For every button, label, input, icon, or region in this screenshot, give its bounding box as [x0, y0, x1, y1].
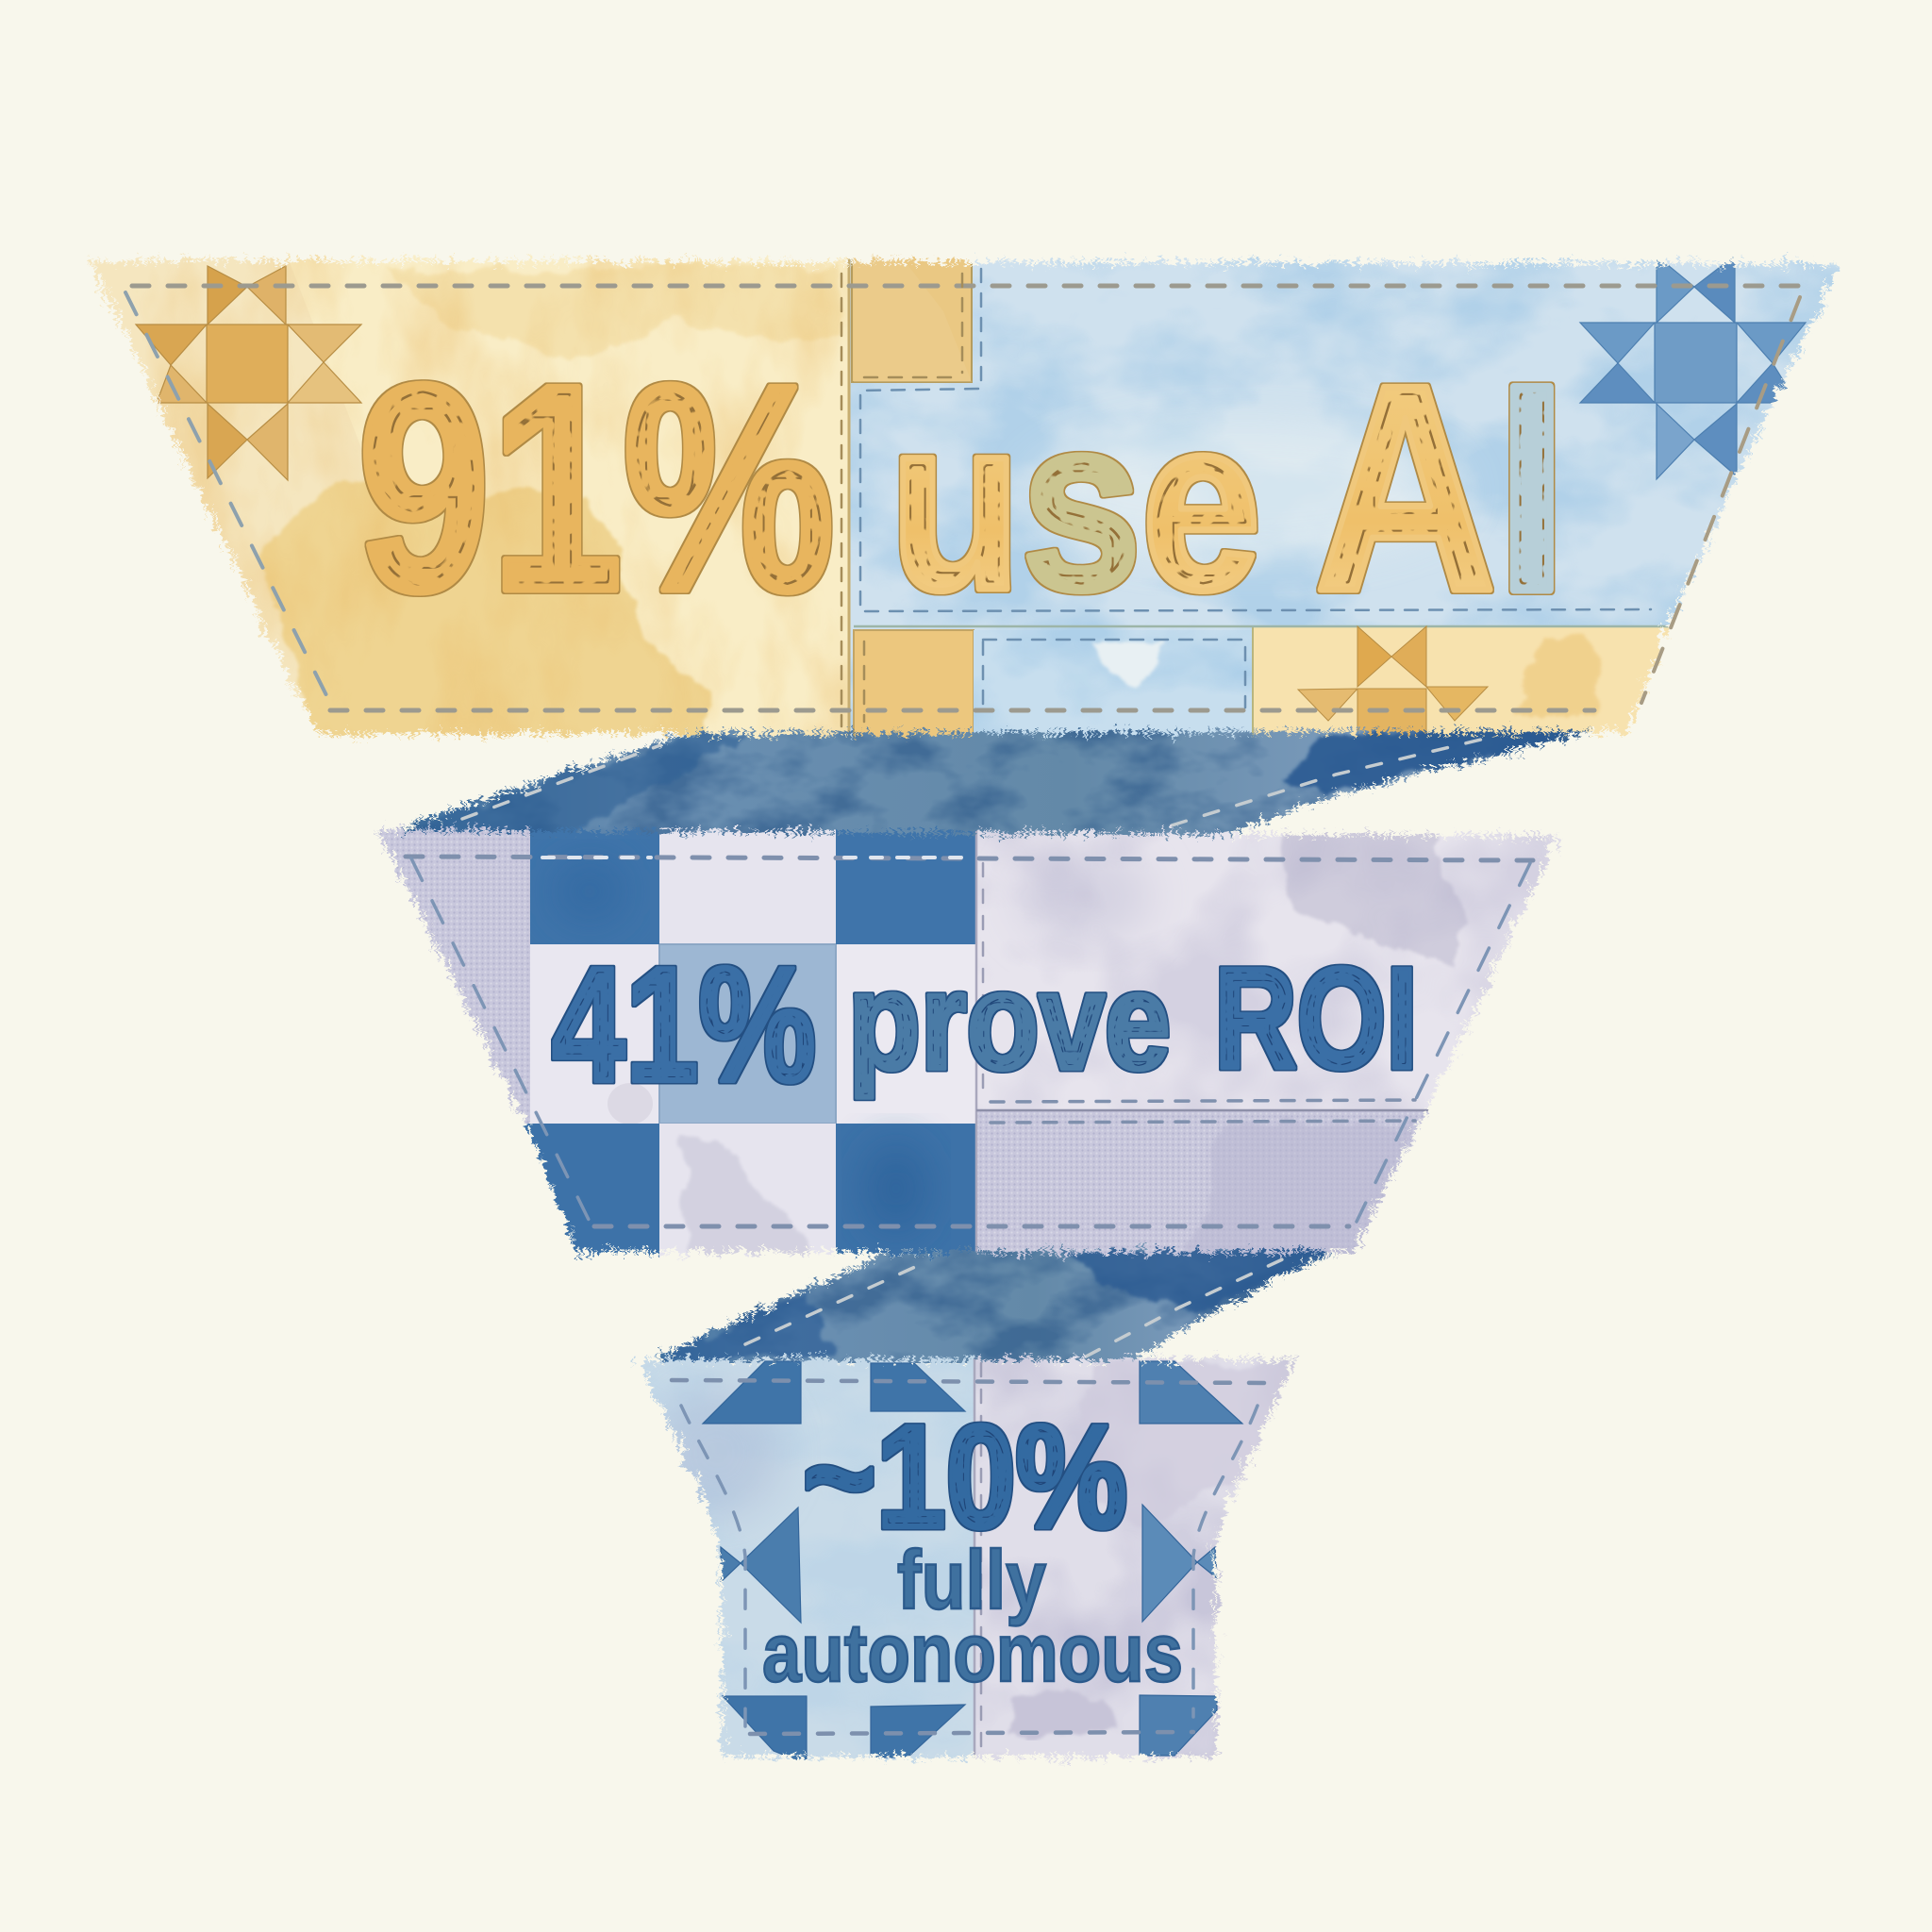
checker block, top right [836, 821, 976, 944]
running stitches of bottom tier [672, 1363, 1269, 1755]
checker block, bottom left [509, 1124, 659, 1265]
text: fully: fully [897, 1533, 1046, 1626]
fabric patches of top tier [66, 245, 1858, 745]
fabric patches of bottom tier [623, 1349, 1314, 1774]
running stitches of middle tier [406, 857, 1533, 1226]
text: AI: AI [1314, 325, 1567, 653]
fabric patches of middle tier [358, 816, 1580, 1272]
triangle blocks [703, 1361, 1242, 1764]
text: 41%: 41% [552, 932, 816, 1116]
ribbon: fold between middle and bottom tiers [651, 1241, 1349, 1363]
checker block, top left [530, 821, 659, 944]
quilt star, gold, upper left [136, 266, 361, 480]
text: use: use [890, 365, 1261, 641]
panel: bottom tier, ~10% fully autonomous [623, 1349, 1314, 1774]
text: 91%: 91% [358, 325, 835, 653]
panel: top tier, 91% use AI [66, 245, 1858, 745]
text: ~10%: ~10% [803, 1395, 1127, 1559]
text: ROI: ROI [1214, 938, 1418, 1099]
quilt star, gold, lower right [1298, 626, 1488, 736]
panel: middle tier, 41% prove ROI [358, 816, 1580, 1272]
text: prove: prove [848, 943, 1171, 1099]
text: autonomous: autonomous [762, 1606, 1183, 1699]
checker block, bottom right [836, 1124, 976, 1265]
ribbon: fold between top and middle tiers [396, 717, 1623, 844]
running stitches of top tier [125, 269, 1811, 726]
quilt star, blue, upper right [1580, 256, 1806, 479]
